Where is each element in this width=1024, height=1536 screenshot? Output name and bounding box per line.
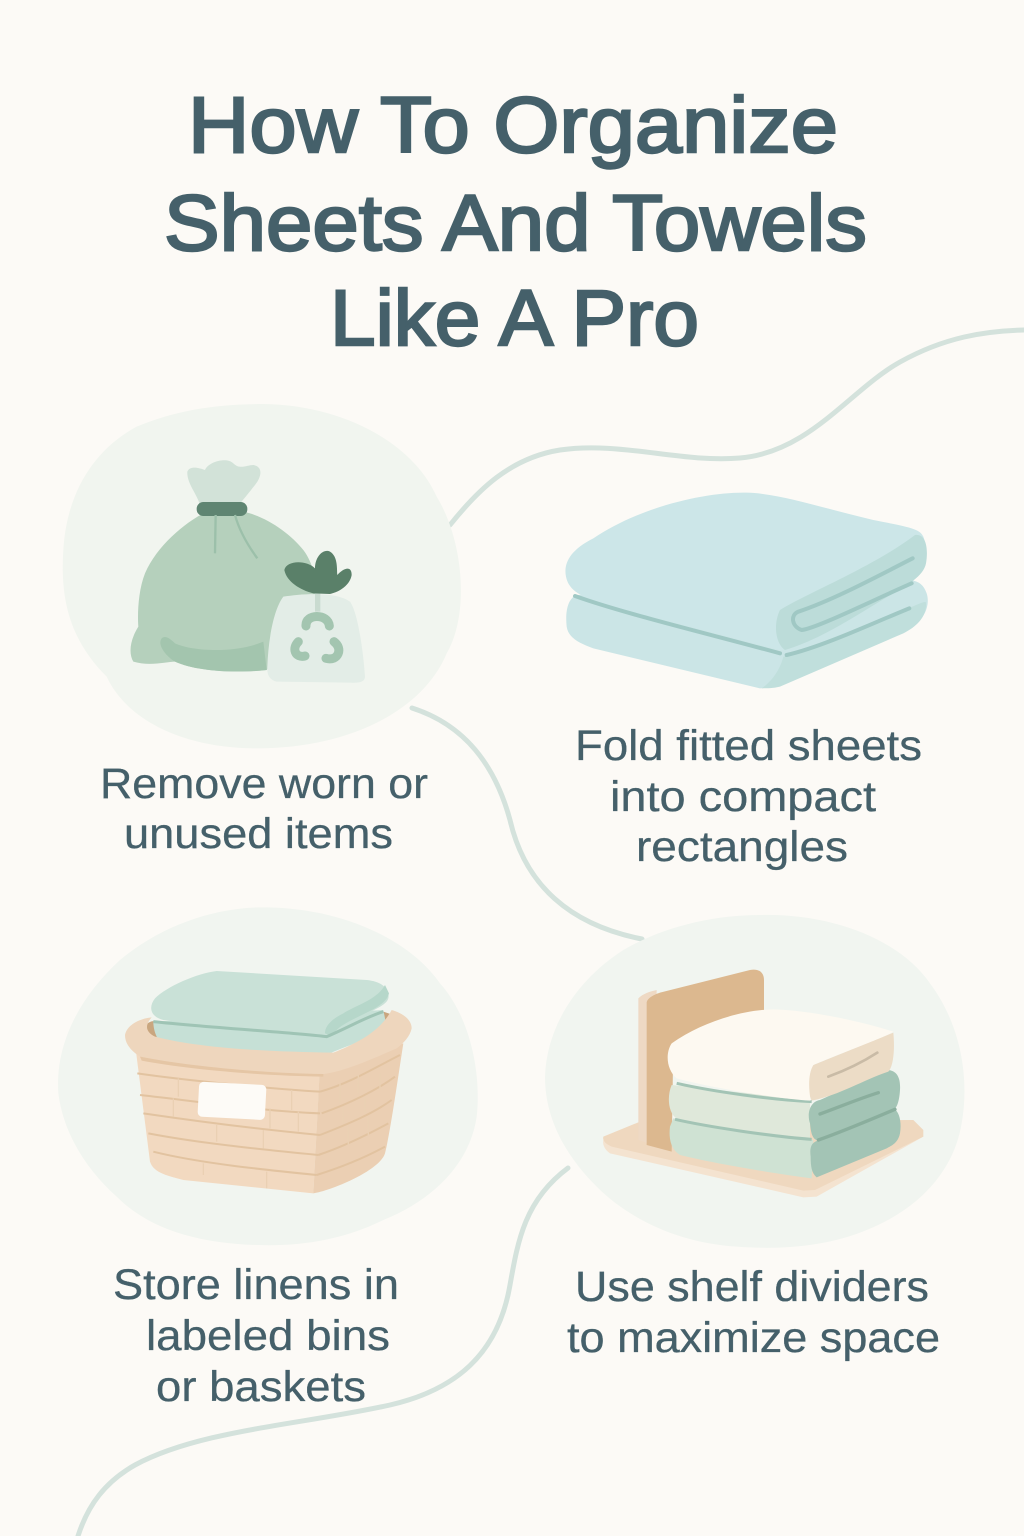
caption: dividers <box>567 1263 940 1362</box>
panel: labeled bins <box>58 907 478 1411</box>
caption: store: or baskets <box>156 1363 366 1411</box>
title: How To Organize <box>188 80 838 169</box>
caption: store <box>113 1261 399 1411</box>
caption: remove: Remove worn or <box>100 760 428 808</box>
caption: store: Store linens in <box>113 1261 399 1309</box>
title: Like A Pro <box>330 273 699 362</box>
caption: fold: rectangles <box>636 823 848 871</box>
caption: remove: unused items <box>124 810 393 858</box>
caption: fold: into compact <box>610 773 876 821</box>
caption: dividers: Use shelf dividers <box>575 1263 929 1311</box>
panel: remove worn items <box>63 404 461 858</box>
caption: fold <box>575 722 922 871</box>
title: Sheets And Towels <box>164 178 867 267</box>
caption: store: labeled bins <box>146 1312 390 1360</box>
panel: fold fitted sheets <box>565 493 928 871</box>
caption: fold: Fold fitted sheets <box>575 722 922 770</box>
caption: remove <box>100 760 428 858</box>
panel: shelf dividers <box>545 915 964 1362</box>
icon: folded sheet <box>565 493 928 688</box>
icon: shelf divider with towels <box>545 915 964 1248</box>
title <box>164 80 867 362</box>
caption: dividers: to maximize space <box>567 1314 940 1362</box>
icon: bags in circle <box>63 404 461 748</box>
icon: basket in circle <box>58 907 478 1245</box>
